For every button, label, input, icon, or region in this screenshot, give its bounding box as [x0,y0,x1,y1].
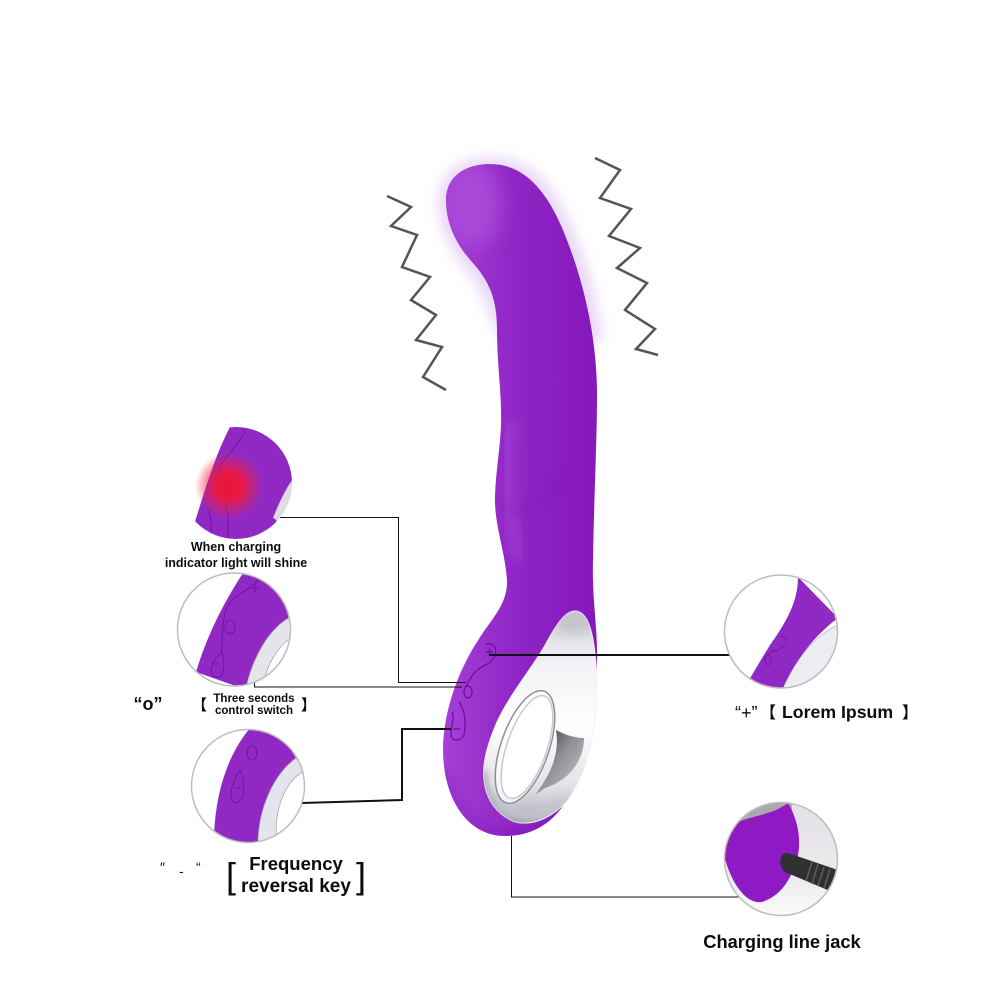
label: minus key: [ [226,855,236,896]
label: O key: control switch [215,705,293,717]
inset: charging indicator [195,427,292,539]
inset: plus button [724,575,840,690]
red indicator light [195,452,263,520]
cable plug [780,853,838,891]
inset: charging jack [724,800,838,916]
label: plus key: 】 [902,704,918,722]
button embossing [451,644,496,740]
label: minus key: - [179,863,184,879]
label: charging: indicator light will shine [165,556,307,570]
chrome shading [484,610,596,820]
label: minus key: “ [196,859,201,875]
label: minus key [160,853,366,897]
label: O key: 【 [192,697,207,714]
label: plus key: 【 [760,704,776,722]
inset: O button [178,565,294,690]
chrome plate [484,611,597,823]
vibration zigzag left [387,196,446,390]
label: O key: “o” [134,694,162,714]
label: plus key: Lorem Ipsum [782,702,893,722]
label: minus key: Frequency [249,853,343,874]
product body [443,163,597,836]
label: plus key: “+” [735,703,758,723]
label: minus key: reversal key [241,876,351,897]
connector lines [254,518,745,897]
chrome ring [483,683,567,811]
label: minus key: ] [356,855,366,896]
chrome dark reflection [535,730,584,795]
label: jack: Charging line jack [703,931,862,952]
inset: minus button [192,725,306,846]
label: O key [134,693,316,717]
label: charging [165,540,307,570]
label: O key: Three seconds [213,693,295,705]
label: charging: When charging [191,540,281,554]
vibration zigzag right [595,158,658,355]
label: O key: 】 [301,697,316,714]
vibrating tip glow [438,157,603,340]
label: minus key: ″ [160,859,165,875]
label: plus key [735,702,918,723]
